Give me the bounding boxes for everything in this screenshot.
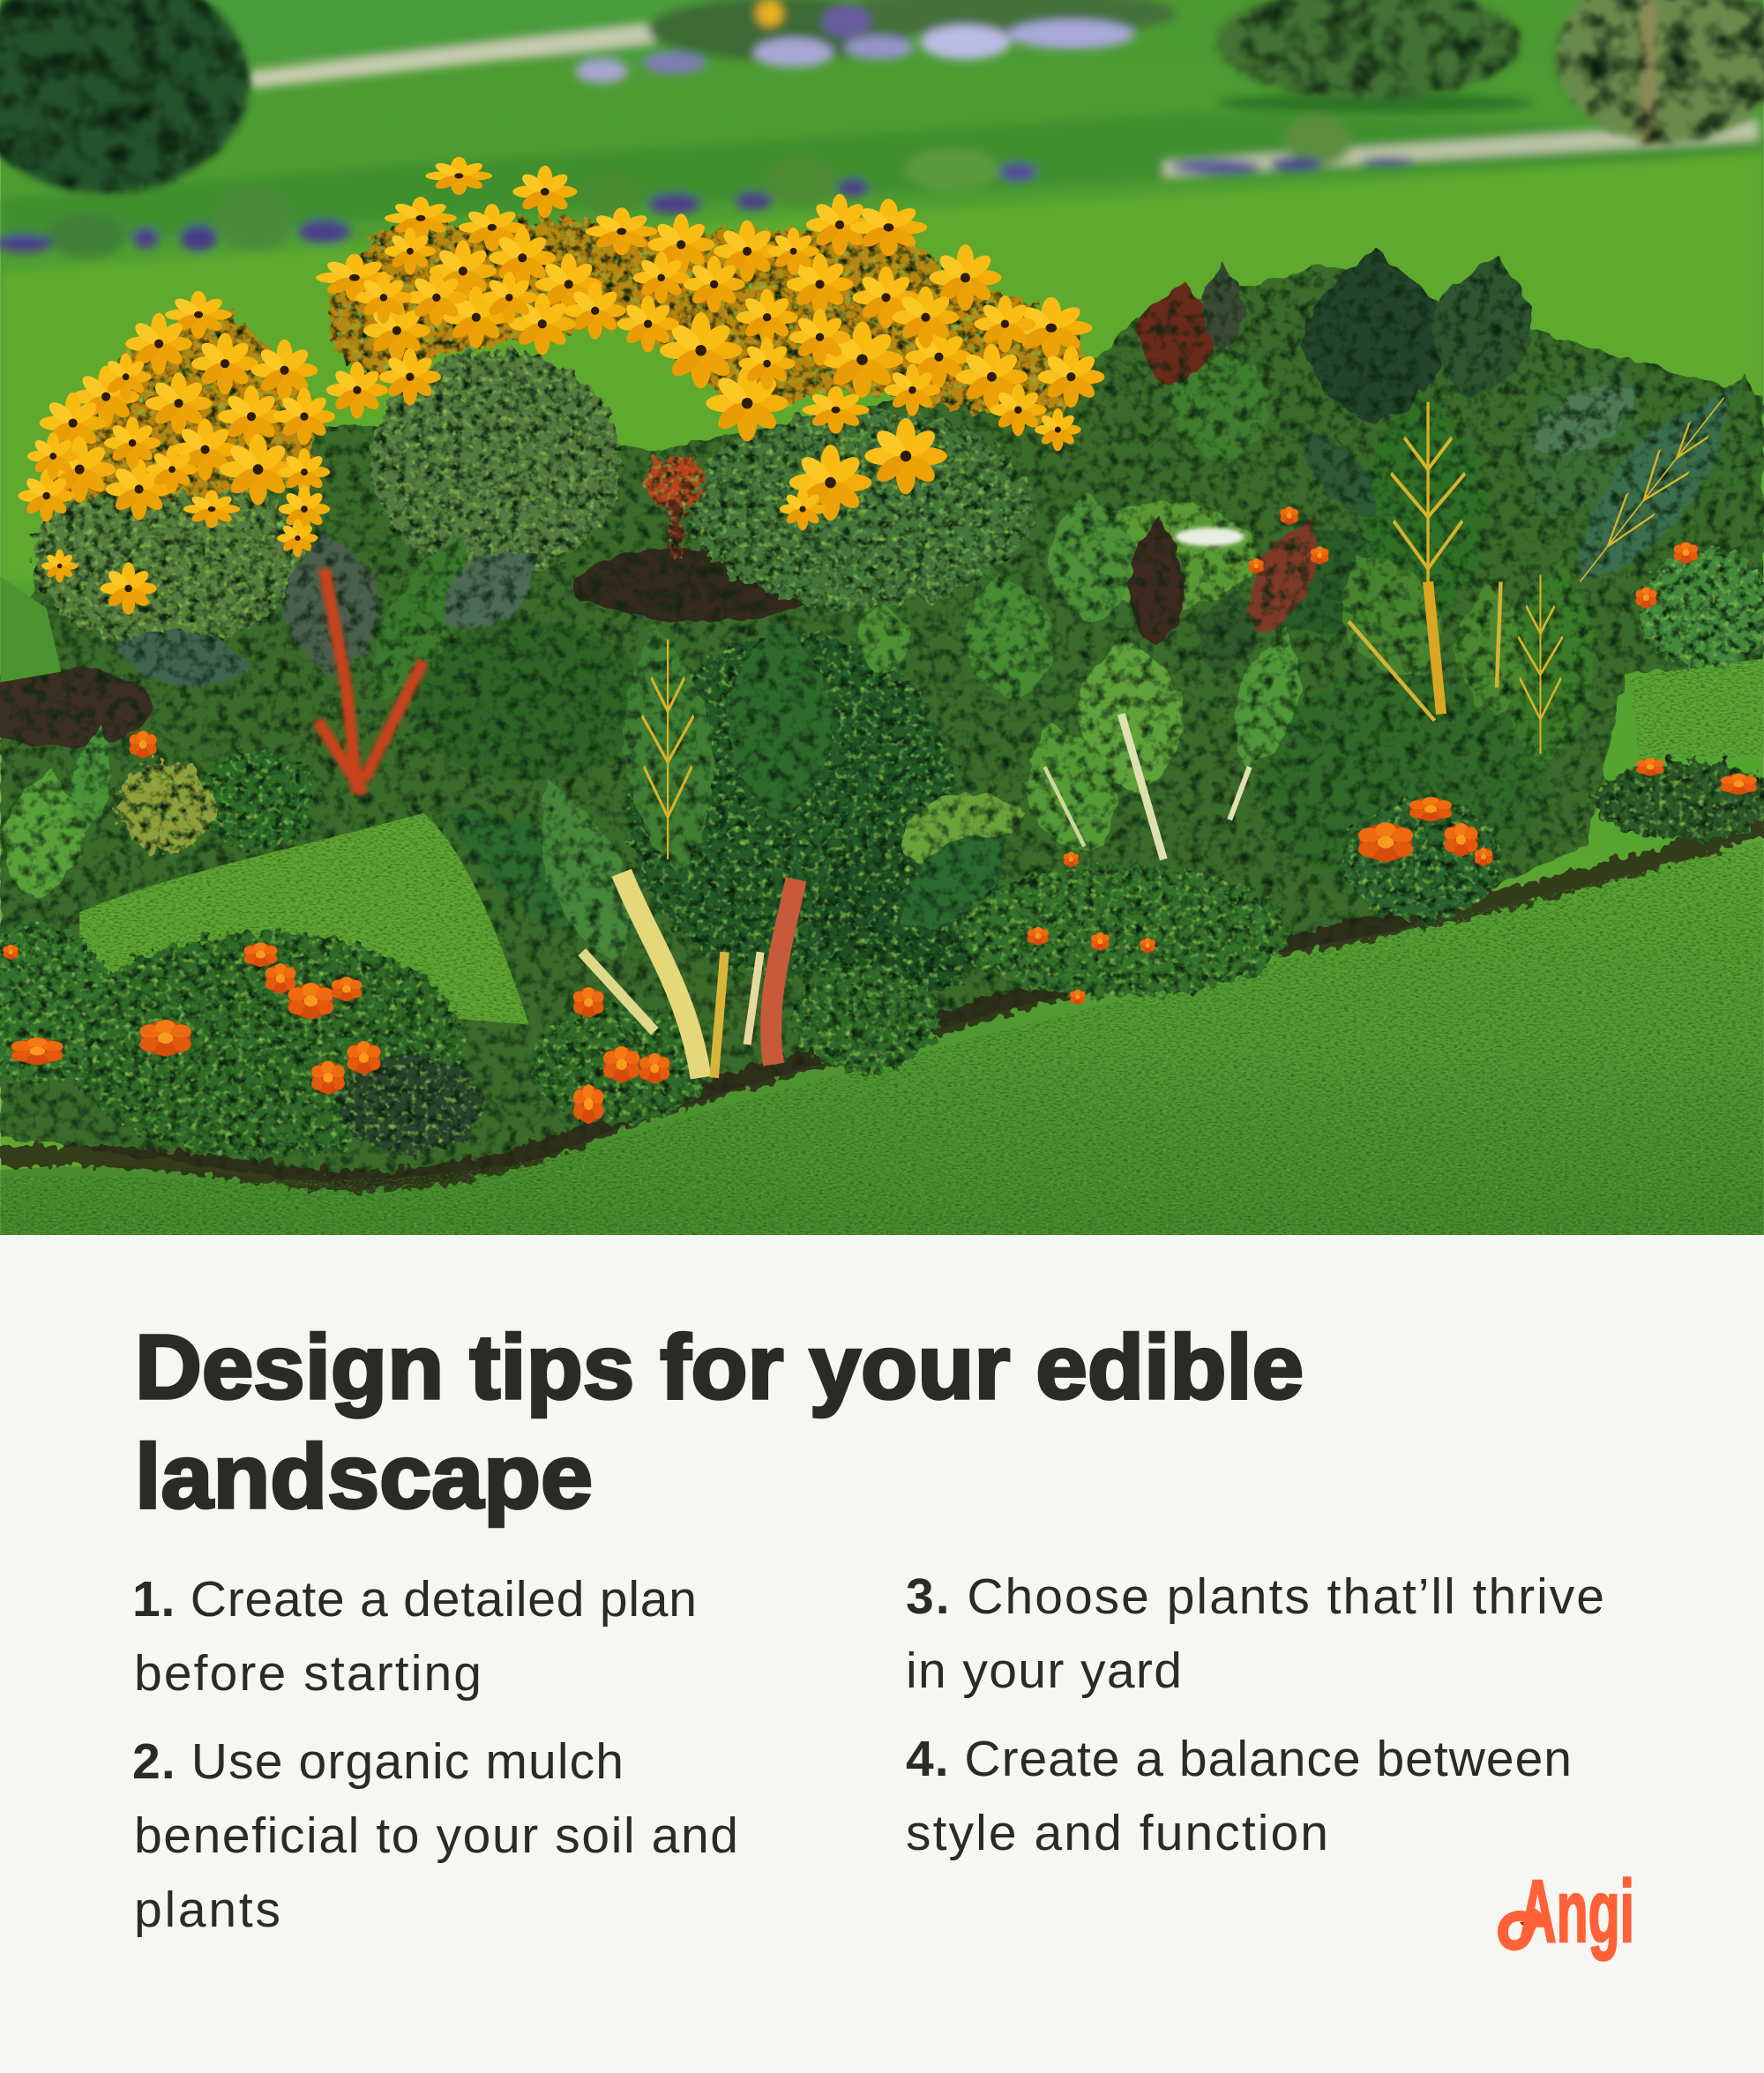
tip 3 [906, 1568, 1604, 1699]
large chard in the centre [422, 600, 1035, 1071]
tip 3: 3. Choose plants that’ll thrive [906, 1568, 1604, 1625]
distant trees and bushes [0, 0, 1764, 193]
tip 1 [132, 1571, 697, 1702]
tip 2: 2. Use organic mulch [132, 1733, 624, 1790]
tip 4 [906, 1731, 1572, 1861]
chard stems [582, 872, 796, 1078]
tip 1: 1. Create a detailed plan [132, 1571, 697, 1628]
foreground lawn [0, 658, 1764, 1235]
tip 2: beneficial to your soil and [134, 1807, 738, 1864]
heading: Design tips for your edible [135, 1316, 1304, 1418]
low marigold plants [0, 549, 1764, 1157]
garden soil and foliage mass [0, 265, 1764, 1190]
heading: landscape [135, 1426, 593, 1527]
middle bright chard [956, 487, 1336, 866]
text panel [132, 1316, 1634, 1962]
tip 1: before starting [134, 1645, 482, 1702]
left-middle lawn patch [0, 577, 61, 682]
Angi logo: Angi [1519, 1862, 1634, 1961]
large chard at the right [1283, 363, 1763, 772]
tip 3: in your yard [906, 1643, 1182, 1699]
tip 2 [132, 1733, 738, 1938]
yellow flowers [19, 157, 1104, 615]
heading [135, 1316, 1304, 1527]
bright leaf at the left edge [0, 722, 120, 904]
orange marigold flowers [4, 506, 1757, 1124]
tip 4: style and function [906, 1805, 1328, 1861]
Angi logo [1503, 1862, 1634, 1961]
tip 4: 4. Create a balance between [906, 1731, 1572, 1787]
dark chard at the left [103, 518, 557, 853]
blurred distant park [0, 0, 1764, 582]
background lawn [0, 0, 1764, 1235]
photo: edible garden bed with flowers and chard [0, 0, 1764, 1235]
flower stems and foliage [34, 350, 1031, 647]
tip 2: plants [134, 1882, 280, 1938]
dark red chard in the back [1132, 244, 1764, 539]
